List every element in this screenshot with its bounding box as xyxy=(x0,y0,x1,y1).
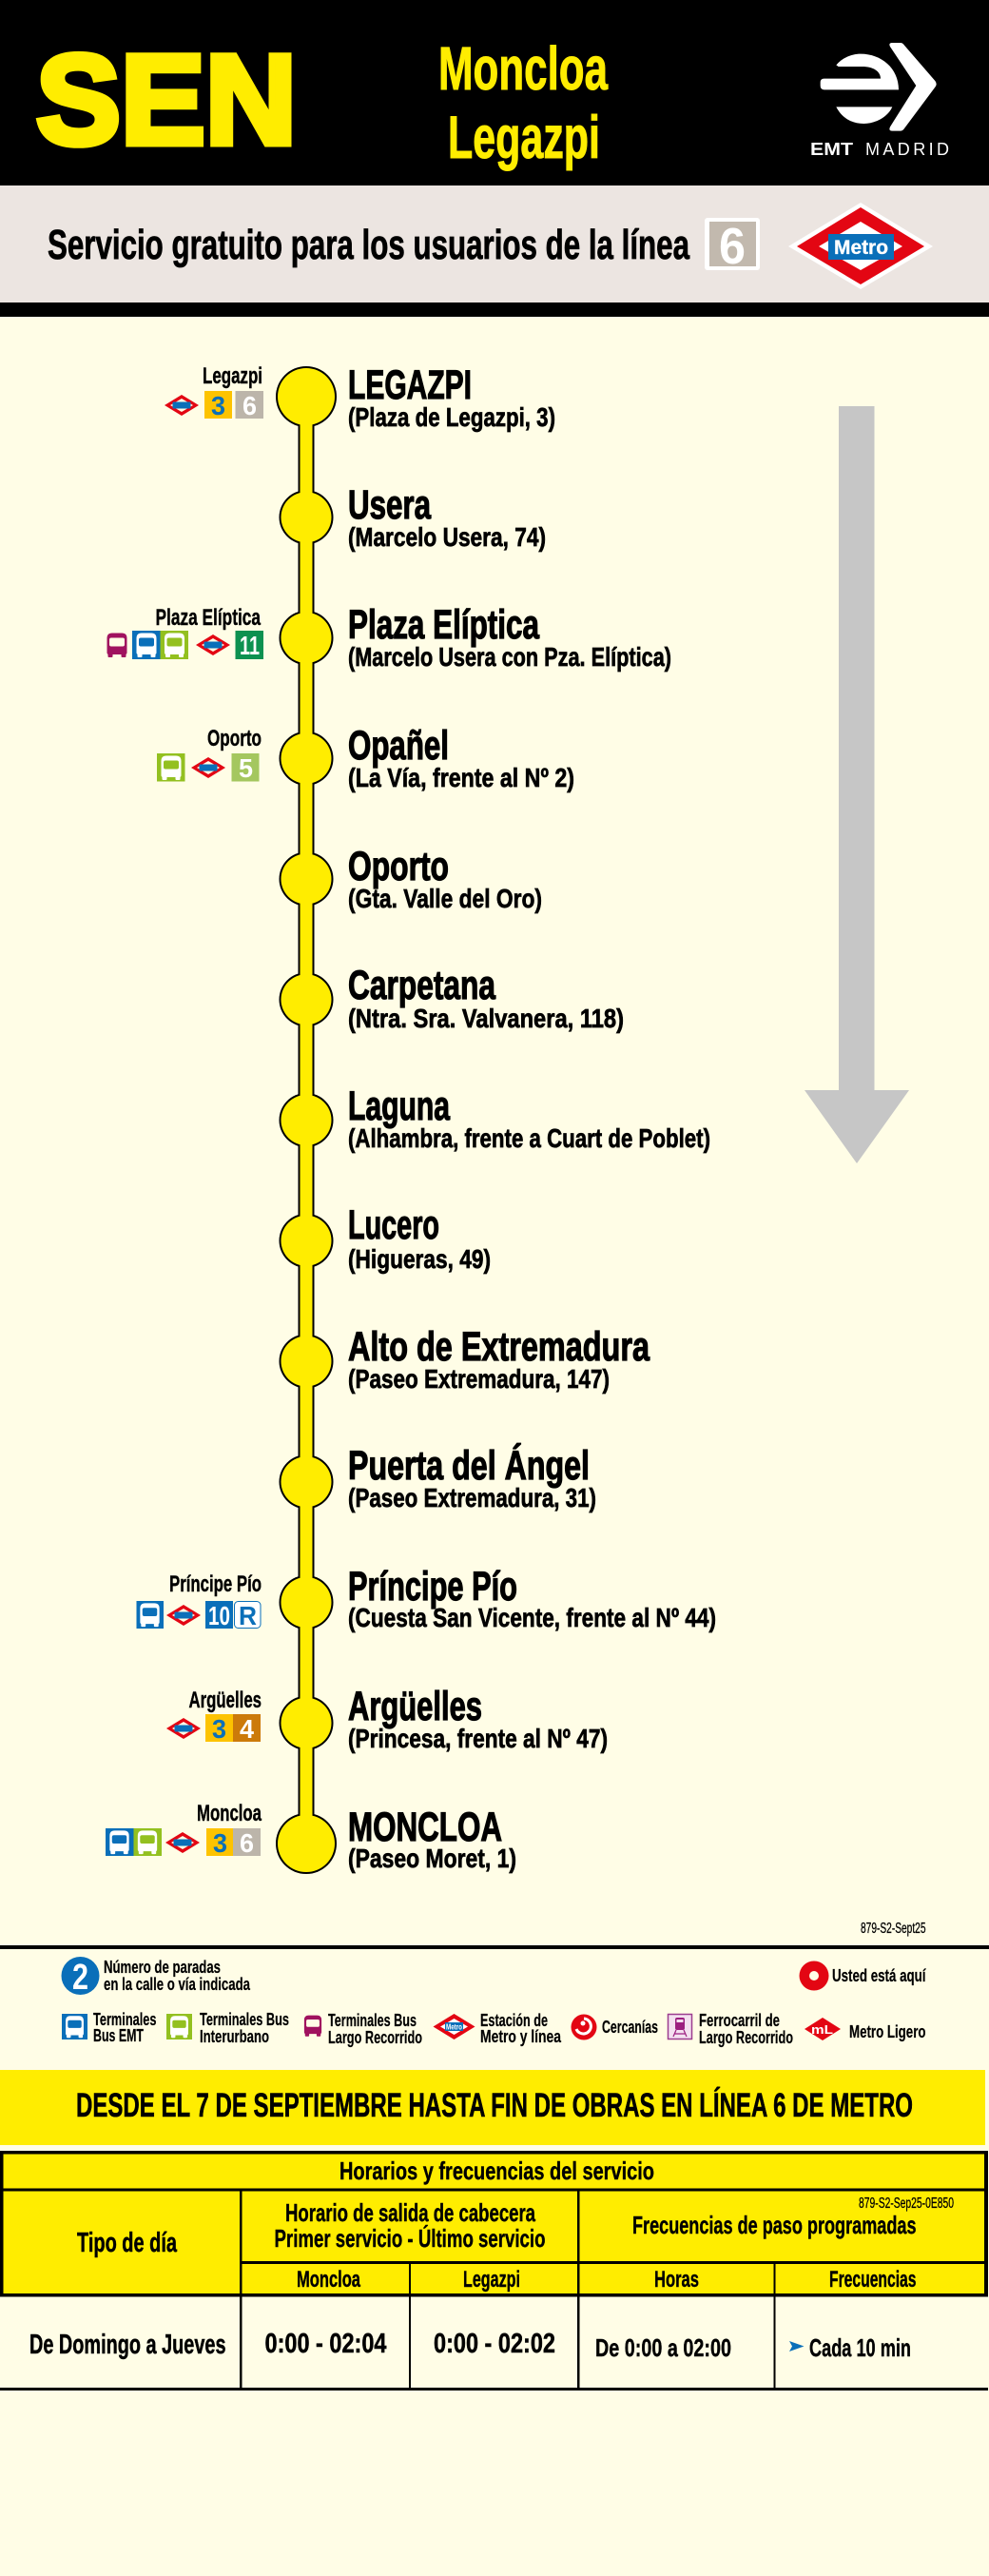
stop: Laguna: Laguna xyxy=(348,1083,451,1129)
stop: Lucero: (Higueras, 49) xyxy=(348,1244,491,1274)
data row: De Domingo a Jueves xyxy=(29,2330,226,2360)
connections: Argüelles: 3 xyxy=(212,1714,226,1744)
column header: departure times: Primer servicio - Último servicio xyxy=(274,2224,546,2253)
legend: light rail: mL xyxy=(811,2022,833,2037)
legend: metro station: Metro y línea xyxy=(480,2027,562,2046)
legend xyxy=(0,1945,989,2047)
stop: Carpetana xyxy=(348,963,624,1033)
connections: Moncloa: 3 xyxy=(213,1828,227,1858)
legend: number of stops: Número de paradas xyxy=(104,1958,221,1977)
legend: long-distance bus terminals: Largo Recorrido xyxy=(328,2028,422,2047)
connections: Oporto xyxy=(157,726,262,783)
stop: Usera: Usera xyxy=(348,482,432,528)
legend: long-distance rail xyxy=(668,2011,793,2047)
title: SEN: SEN xyxy=(36,29,297,171)
stop: Puerta del Ángel: Puerta del Ángel xyxy=(348,1443,590,1489)
stop: Príncipe Pío: (Cuesta San Vicente, frente al Nº 44) xyxy=(348,1603,716,1632)
connections: Príncipe Pío: Príncipe Pío xyxy=(169,1571,262,1597)
stop: Legazpi xyxy=(348,362,555,432)
legend: EMT bus terminals: Terminales xyxy=(93,2010,156,2029)
data row: De 0:00 a 02:00 xyxy=(595,2333,731,2362)
legend: cercanías xyxy=(571,2015,658,2039)
data row xyxy=(29,2329,911,2362)
connections: Príncipe Pío: 10 xyxy=(208,1601,230,1630)
stop: Argüelles: (Princesa, frente al Nº 47) xyxy=(348,1724,608,1753)
data row: Cada 10 min xyxy=(809,2333,911,2362)
legend: metro station: Estación de xyxy=(480,2011,548,2030)
connections: Príncipe Pío: R xyxy=(239,1601,257,1630)
stop: Opañel xyxy=(348,723,574,792)
legend: interurban bus terminals: Interurbano xyxy=(200,2027,269,2046)
stop: Lucero xyxy=(348,1202,491,1274)
stop: Opañel: (La Vía, frente al Nº 2) xyxy=(348,763,574,792)
legend: cercanías: Cercanías xyxy=(602,2018,658,2037)
stop: Alto de Extremadura: Alto de Extremadura xyxy=(348,1324,650,1370)
column header: frequencies xyxy=(632,2195,954,2239)
stop: Moncloa: (Paseo Moret, 1) xyxy=(348,1844,516,1873)
connections: Moncloa: 6 xyxy=(240,1828,254,1858)
connections: Plaza Elíptica: 11 xyxy=(240,631,260,660)
stop: Oporto xyxy=(348,844,542,913)
stop: Usera xyxy=(348,482,546,552)
heading: free service: Servicio gratuito para los usuarios de la línea xyxy=(48,222,689,268)
route terminus names xyxy=(438,34,608,171)
legend: long-distance bus terminals xyxy=(304,2011,422,2047)
free service band xyxy=(0,185,989,317)
stop: Plaza Elíptica: Plaza Elíptica xyxy=(348,602,540,648)
logo: EMT Madrid: EMT xyxy=(810,140,853,159)
stop: Alto de Extremadura: (Paseo Extremadura, 147) xyxy=(348,1364,610,1394)
connections: Argüelles xyxy=(166,1688,262,1744)
stop: Príncipe Pío xyxy=(348,1564,716,1632)
sub-headers xyxy=(297,2267,917,2293)
legend: metro station xyxy=(434,2011,562,2046)
stop: Carpetana: (Ntra. Sra. Valvanera, 118) xyxy=(348,1004,624,1033)
data row: 0:00 - 02:04 xyxy=(264,2329,386,2359)
stop: Oporto: (Gta. Valle del Oro) xyxy=(348,884,542,913)
column header: day type: Tipo de día xyxy=(77,2228,178,2258)
stop: Argüelles xyxy=(348,1684,608,1753)
legend: number of stops xyxy=(61,1957,251,1998)
route line with stops xyxy=(276,366,337,1874)
banner: validity dates xyxy=(0,2070,985,2145)
arrow: direction of travel xyxy=(805,406,909,1163)
connections: Plaza Elíptica: Plaza Elíptica xyxy=(156,605,261,631)
legend: EMT bus terminals: Bus EMT xyxy=(93,2026,144,2045)
stop: Argüelles: Argüelles xyxy=(348,1684,482,1729)
connections: Oporto: Oporto xyxy=(207,726,262,751)
connections: Legazpi xyxy=(165,363,263,420)
stop: Carpetana: Carpetana xyxy=(348,963,496,1008)
connections: Legazpi: Legazpi xyxy=(203,363,262,389)
connections: Argüelles: Argüelles xyxy=(188,1688,262,1713)
stop: Puerta del Ángel xyxy=(348,1443,596,1512)
connections: Legazpi: 3 xyxy=(211,391,225,420)
stop: Lucero: Lucero xyxy=(348,1202,439,1248)
connections: Plaza Elíptica xyxy=(107,605,263,660)
header band xyxy=(0,0,989,185)
sub-headers: Horas xyxy=(654,2267,699,2293)
stop: Moncloa: MONCLOA xyxy=(348,1805,502,1850)
table: timetable xyxy=(0,2151,988,2391)
stop: Príncipe Pío: Príncipe Pío xyxy=(348,1564,517,1610)
legend: long-distance bus terminals: Terminales Bus xyxy=(328,2011,417,2030)
version code: 879-S2-Sept25 xyxy=(861,1921,926,1937)
stop: Plaza Elíptica xyxy=(348,602,671,672)
stop: Alto de Extremadura xyxy=(348,1324,650,1394)
legend: number of stops: 2 xyxy=(72,1958,88,1998)
logo: Metro: Metro xyxy=(834,237,888,259)
stop: Laguna: (Alhambra, frente a Cuart de Poblet) xyxy=(348,1123,710,1153)
badge: line 6 xyxy=(705,218,760,275)
table title: Horarios y frecuencias del servicio xyxy=(339,2156,654,2185)
route terminus names: Moncloa xyxy=(438,34,608,103)
connections: Moncloa: Moncloa xyxy=(197,1801,262,1826)
legend: light rail: Metro Ligero xyxy=(849,2022,926,2041)
connections: Oporto: 5 xyxy=(239,753,253,783)
legend: long-distance rail: Ferrocarril de xyxy=(699,2011,780,2030)
legend: number of stops: en la calle o vía indicada xyxy=(104,1975,251,1994)
connections: Legazpi: 6 xyxy=(242,391,257,420)
stop: Puerta del Ángel: (Paseo Extremadura, 31) xyxy=(348,1483,596,1512)
legend: you are here: Usted está aquí xyxy=(832,1966,926,1985)
stop: Opañel: Opañel xyxy=(348,723,449,769)
stop: Oporto: Oporto xyxy=(348,844,449,889)
connections: Argüelles: 4 xyxy=(240,1714,254,1744)
stop: Usera: (Marcelo Usera, 74) xyxy=(348,522,546,552)
logo: EMT Madrid xyxy=(810,43,949,159)
legend: EMT bus terminals xyxy=(62,2010,156,2045)
sub-headers: Legazpi xyxy=(463,2267,520,2293)
badge: line 6: 6 xyxy=(719,218,746,275)
logo: EMT Madrid: MADRID xyxy=(865,140,949,159)
legend: you are here xyxy=(799,1961,926,1990)
sub-headers: Moncloa xyxy=(297,2267,360,2293)
legend: interurban bus terminals xyxy=(166,2010,289,2046)
stop: Laguna xyxy=(348,1083,710,1153)
legend: light rail xyxy=(805,2018,926,2041)
legend: long-distance rail: Largo Recorrido xyxy=(699,2028,793,2047)
stop: Moncloa xyxy=(348,1805,516,1873)
legend: interurban bus terminals: Terminales Bus xyxy=(200,2010,289,2029)
column header: departure times: Horario de salida de cabecera xyxy=(285,2198,535,2227)
stop: Legazpi: LEGAZPI xyxy=(348,362,472,408)
logo: Metro xyxy=(788,203,933,289)
stop: Legazpi: (Plaza de Legazpi, 3) xyxy=(348,402,555,432)
data row: 0:00 - 02:02 xyxy=(434,2329,555,2359)
connections: Príncipe Pío xyxy=(137,1571,262,1630)
legend: metro station: Metro xyxy=(446,2022,462,2032)
stop: Plaza Elíptica: (Marcelo Usera con Pza. Elíptica) xyxy=(348,642,671,672)
connections: Moncloa xyxy=(106,1801,262,1858)
sub-headers: Frecuencias xyxy=(829,2267,917,2293)
route terminus names: Legazpi xyxy=(448,105,600,171)
column header: departure times xyxy=(274,2198,546,2253)
